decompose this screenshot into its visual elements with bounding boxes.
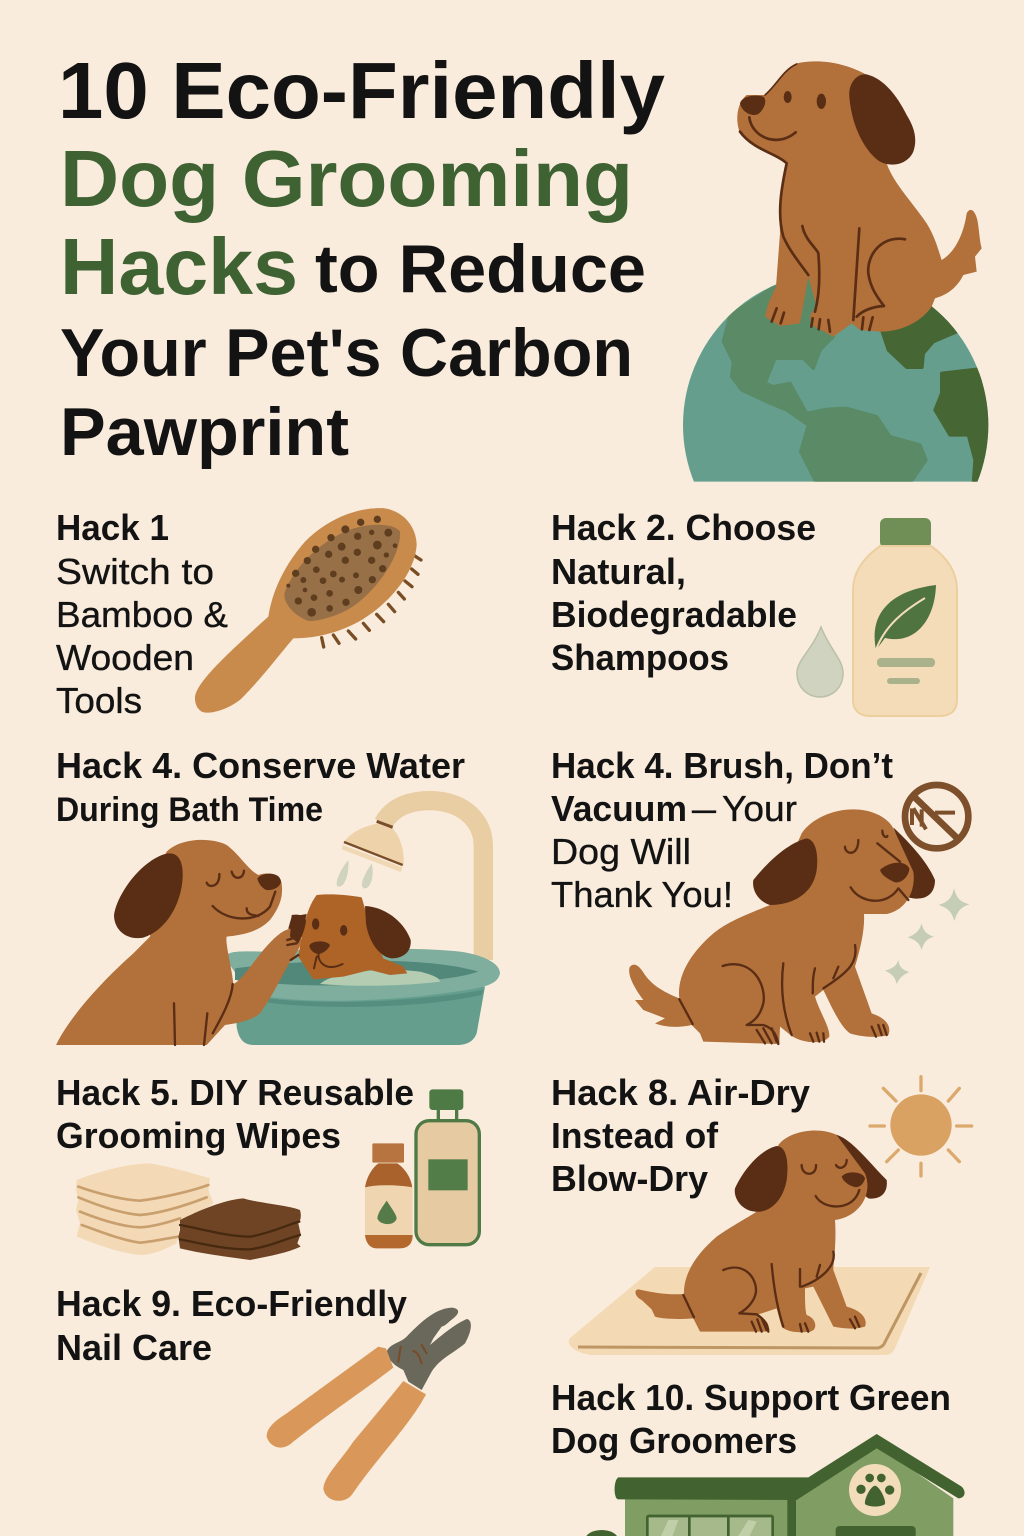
hack 8 heading: Instead of (551, 1115, 719, 1156)
dog body (635, 1131, 867, 1332)
hack 10 heading (551, 1377, 951, 1461)
near ear (735, 1146, 787, 1212)
dog eyes (784, 91, 826, 109)
big dog (56, 840, 306, 1045)
tub (227, 949, 500, 1045)
shower head (342, 821, 404, 872)
illustration: air-drying dog with sun (635, 1077, 972, 1332)
shop paw badge (849, 1464, 901, 1516)
hack 1 heading and text: Tools (56, 680, 142, 721)
hack 4 brush heading: – (692, 788, 716, 829)
title: 10 Eco-Friendly (58, 46, 666, 135)
hack 1 heading and text: Switch to (56, 551, 214, 592)
shop roof (615, 1434, 965, 1500)
hack 4 brush heading: Hack 4. Brush, Don’t (551, 745, 893, 786)
title: to Reduce (315, 231, 646, 307)
title: Your Pet's Carbon (60, 315, 633, 391)
hack 10 heading: Hack 10. Support Green (551, 1377, 951, 1418)
illustration: dog bathing a puppy (56, 801, 500, 1045)
hack 2 heading: Shampoos (551, 637, 729, 678)
icon: no vacuum sign (905, 785, 968, 848)
water drops (337, 860, 348, 887)
hack 4 brush heading: Thank You! (551, 874, 733, 915)
hack 2 heading: Biodegradable (551, 594, 797, 635)
illustration: drying mat (569, 1267, 930, 1355)
icon: bamboo brush (195, 508, 421, 713)
illustration: brushed dog (629, 785, 969, 1044)
hack 5 heading (56, 1072, 414, 1156)
tan wipes (76, 1163, 213, 1255)
dog lines (740, 64, 905, 332)
hack 5 heading: Grooming Wipes (56, 1115, 341, 1156)
shop wing (625, 1498, 792, 1536)
icon: nail clippers (267, 1308, 471, 1501)
puppy (288, 894, 411, 979)
shop house (795, 1445, 953, 1536)
hack 4 brush heading: Dog Will (551, 831, 691, 872)
hack 8 heading (551, 1072, 810, 1199)
dog body (737, 61, 982, 337)
near ear (753, 838, 817, 905)
hack 2 heading (551, 507, 816, 678)
sun (870, 1077, 972, 1176)
hack 2 heading: Hack 2. Choose (551, 507, 816, 548)
hack 4 conserve water heading: During Bath Time (56, 791, 323, 829)
dog lines (683, 1160, 859, 1332)
hack 2 heading: Natural, (551, 551, 686, 592)
illustration: dog on globe (680, 61, 1000, 487)
hack 1 heading and text: Hack 1 (56, 507, 169, 548)
dog lines (679, 831, 908, 1044)
hack 8 heading: Blow-Dry (551, 1158, 708, 1199)
hack 1 heading and text: Wooden (56, 637, 194, 678)
hack 9 heading (56, 1283, 407, 1368)
hack 9 heading: Hack 9. Eco-Friendly (56, 1283, 407, 1324)
hack 4 conserve water heading (56, 745, 465, 829)
hack 4 brush heading: Vacuum (551, 788, 687, 829)
far ear (893, 827, 935, 899)
dog ear (849, 74, 915, 165)
hack 4 brush heading (551, 745, 893, 915)
title: Dog Grooming (60, 134, 633, 223)
hack 8 heading: Hack 8. Air-Dry (551, 1072, 810, 1113)
shop door (836, 1526, 916, 1536)
title: Hacks (60, 222, 298, 311)
icon: sparkles (885, 888, 969, 984)
hack 4 conserve water heading: Hack 4. Conserve Water (56, 745, 465, 786)
hack 5 heading: Hack 5. DIY Reusable (56, 1072, 414, 1113)
brown wipes (178, 1198, 301, 1260)
globe (683, 276, 988, 482)
bush (585, 1530, 618, 1536)
dog nose (740, 96, 765, 115)
small dropper bottle (365, 1143, 413, 1248)
dog body (629, 809, 914, 1044)
shower pipe (383, 801, 483, 960)
hack 4 brush heading: Your (722, 788, 797, 829)
far ear (833, 1134, 887, 1199)
hack 9 heading: Nail Care (56, 1327, 212, 1368)
title: Pawprint (60, 394, 349, 470)
shop windows (647, 1516, 773, 1536)
hack 10 heading: Dog Groomers (551, 1420, 797, 1461)
icon: reusable wipes and bottles (76, 1089, 479, 1260)
hack 1 heading and text (56, 507, 228, 721)
hack 1 heading and text: Bamboo & (56, 594, 228, 635)
title (58, 46, 666, 470)
large bottle (416, 1089, 479, 1245)
icon: shampoo bottle and drop (797, 518, 957, 716)
illustration: green grooming shop (585, 1434, 965, 1536)
nose (842, 1172, 865, 1187)
nose (880, 863, 909, 882)
